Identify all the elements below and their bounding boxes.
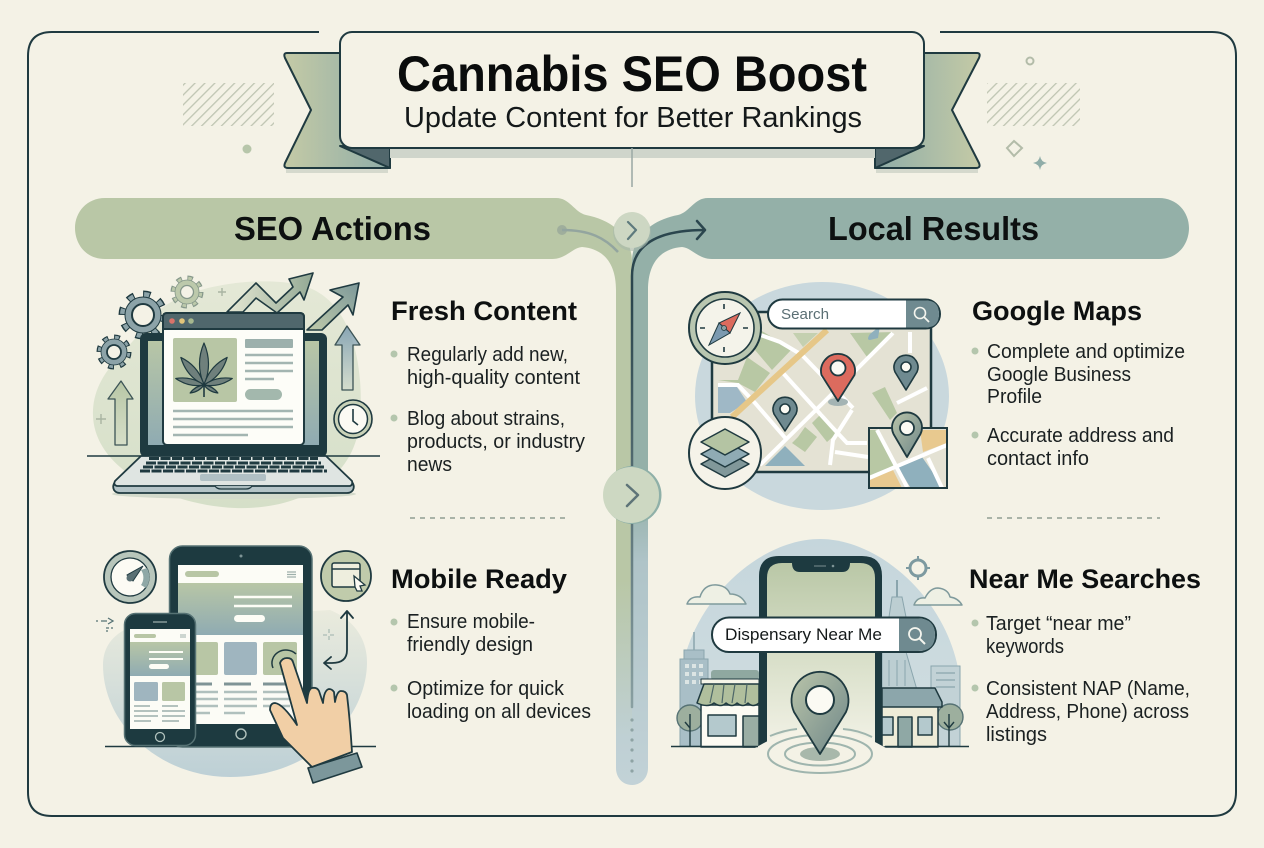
icon: large gear — [123, 295, 163, 335]
text block: near me searches: Consistent NAP (Name, — [986, 678, 1190, 700]
text block: near me searches — [969, 564, 1201, 746]
icon: clock — [334, 400, 372, 438]
search bar: Search — [781, 307, 829, 323]
illustration: google maps — [689, 282, 949, 510]
arrow: zigzag growth — [227, 273, 313, 313]
icon: mini map pin — [892, 412, 922, 457]
text block: fresh content: high-quality content — [407, 367, 580, 389]
city buildings — [680, 580, 960, 746]
arrow: two-way curve — [324, 611, 353, 669]
icon: medium gear — [174, 279, 200, 305]
flow line from SEO Actions — [557, 225, 618, 252]
browser window — [163, 313, 304, 445]
text block: fresh content: news — [407, 454, 452, 476]
left storefront — [697, 670, 759, 747]
icon: speed gauge — [104, 551, 156, 603]
heading: Mobile Ready — [391, 564, 567, 594]
tablet — [170, 546, 312, 747]
text block: google maps: Complete and optimize — [987, 341, 1185, 363]
title: Cannabis SEO Boost — [397, 46, 867, 102]
heading: Google Maps — [972, 296, 1142, 326]
text block: mobile ready: Ensure mobile- — [407, 611, 535, 633]
icon: pin east — [894, 355, 918, 390]
text block: near me searches: Address, Phone) across — [986, 701, 1189, 723]
text block: fresh content — [390, 296, 585, 476]
icon: location target — [906, 556, 930, 580]
text block: mobile ready — [390, 564, 591, 723]
icon: large location pin — [792, 672, 848, 754]
text block: mobile ready: loading on all devices — [407, 701, 591, 723]
large center chevron — [603, 466, 662, 524]
illustration: near me searches — [671, 539, 969, 773]
text block: google maps: Accurate address and — [987, 425, 1174, 447]
icon: cannabis leaf — [175, 343, 233, 397]
icon: layers — [689, 417, 761, 489]
icon: pointing hand — [270, 658, 362, 783]
text block: near me searches: keywords — [986, 636, 1064, 658]
search bar — [712, 618, 936, 652]
section heading: SEO Actions — [234, 210, 431, 247]
text block: near me searches: listings — [986, 724, 1047, 746]
arrow: blue up — [335, 326, 360, 390]
text block: fresh content: Blog about strains, — [407, 408, 565, 430]
text block: google maps: Profile — [987, 386, 1042, 408]
title banner — [340, 32, 924, 158]
illustration: fresh content laptop — [87, 273, 380, 508]
text block: google maps — [972, 296, 1185, 470]
text block: fresh content: products, or industry — [407, 431, 585, 453]
search bar: Dispensary Near Me — [725, 625, 882, 644]
section heading: Local Results — [828, 210, 1039, 247]
arrow: green up — [108, 381, 133, 445]
decorative marks left — [183, 83, 274, 154]
phone frame — [759, 556, 882, 746]
mini map card — [869, 428, 947, 488]
map — [712, 312, 931, 472]
connector line from title — [631, 148, 633, 187]
text block: near me searches: Target “near me” — [986, 613, 1131, 635]
text block: fresh content: Regularly add new, — [407, 344, 568, 366]
icon: browser cursor — [321, 551, 371, 601]
timeline end dots — [630, 718, 634, 773]
title ribbon right — [875, 53, 980, 173]
flow arrow to Local Results — [632, 221, 705, 707]
text block: google maps: Google Business — [987, 364, 1131, 386]
laptop screen — [140, 333, 327, 457]
phone — [124, 614, 196, 746]
icon: compass — [689, 292, 761, 364]
text block: google maps: contact info — [987, 448, 1089, 470]
right storefront — [882, 688, 942, 747]
text block: mobile ready: friendly design — [407, 634, 533, 656]
arrow: growth — [307, 283, 359, 330]
laptop base — [112, 456, 356, 499]
icon: small gear — [100, 338, 128, 366]
text block: mobile ready: Optimize for quick — [407, 678, 565, 700]
title ribbon left — [284, 53, 390, 173]
trees — [677, 704, 963, 746]
decorative marks right — [987, 58, 1080, 170]
heading: Near Me Searches — [969, 564, 1201, 594]
small connector chevron — [613, 212, 651, 251]
clouds — [687, 585, 962, 605]
search bar — [768, 300, 940, 328]
icon: pin west — [773, 397, 797, 431]
subtitle: Update Content for Better Rankings — [404, 102, 862, 134]
icon: red pin — [821, 354, 855, 401]
illustration: mobile ready devices — [96, 546, 376, 783]
ground and ripple — [671, 727, 969, 773]
heading: Fresh Content — [391, 296, 577, 326]
